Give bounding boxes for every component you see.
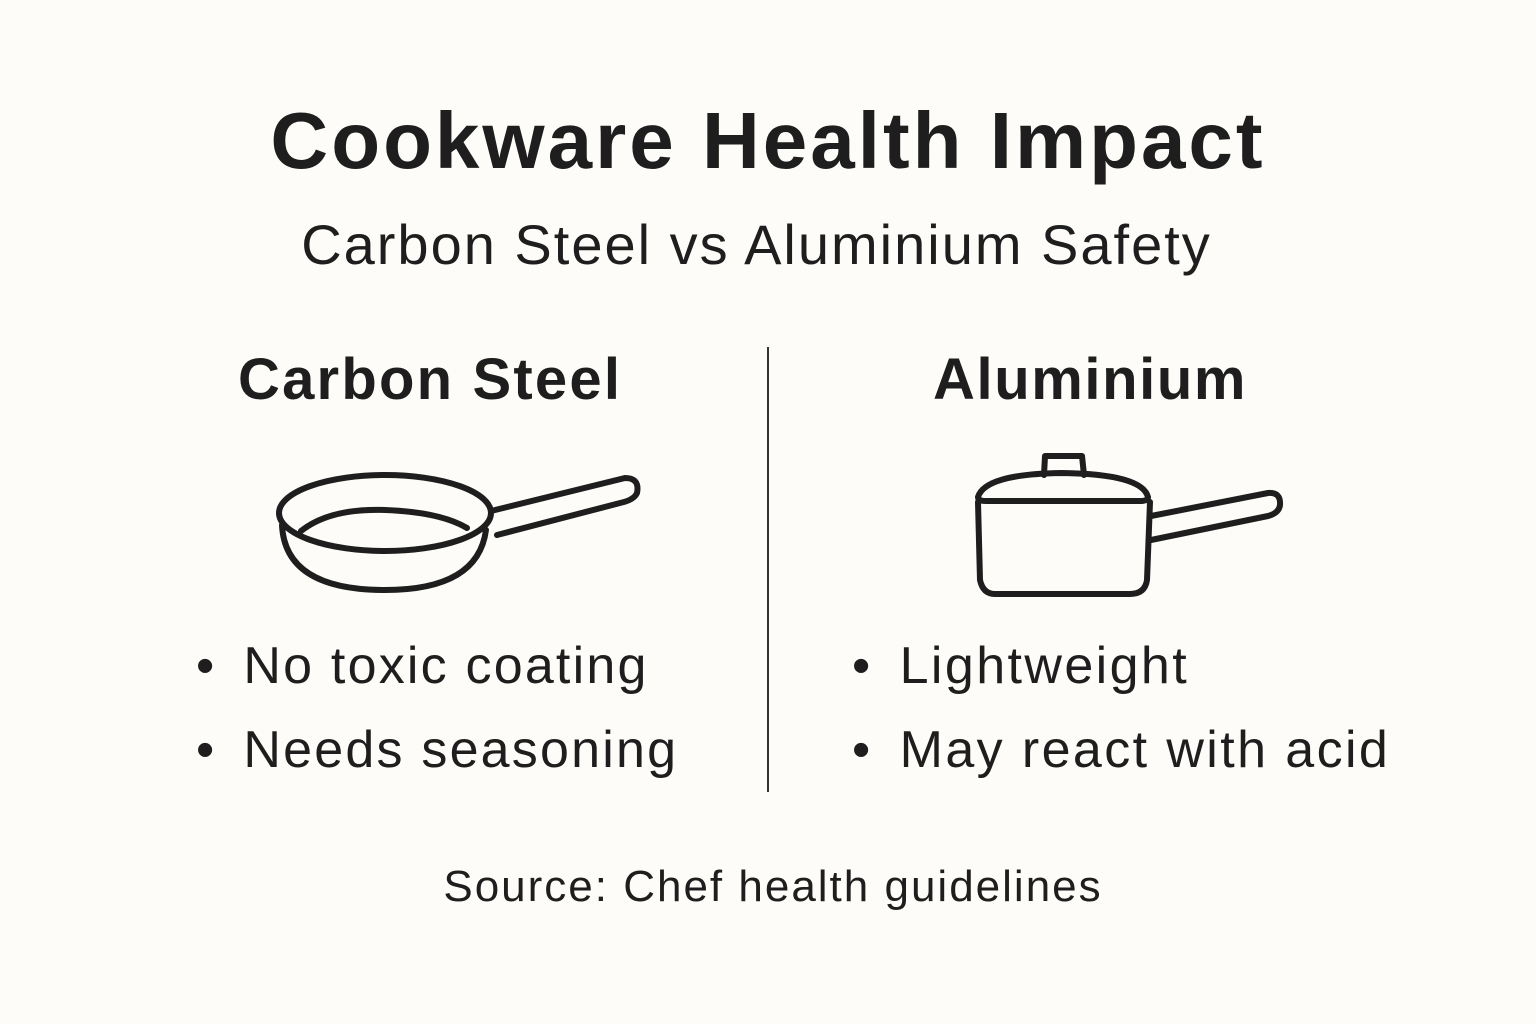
bullets: aluminium (852, 637, 1390, 779)
bullets: carbon steel (196, 637, 678, 779)
subtitle: Carbon Steel vs Aluminium Safety (301, 213, 1212, 276)
heading: aluminium: Aluminium (933, 347, 1247, 412)
bullets: aluminium: • May react with acid (852, 721, 1390, 779)
bullets: carbon steel: • No toxic coating (196, 637, 649, 695)
divider (767, 347, 769, 792)
bullets: carbon steel: • Needs seasoning (196, 721, 678, 779)
source: Source: Chef health guidelines (443, 862, 1103, 911)
heading: carbon steel: Carbon Steel (238, 347, 622, 412)
icon: saucepan (975, 453, 1284, 597)
title: Cookware Health Impact (270, 96, 1266, 185)
icon: frying pan (276, 472, 640, 593)
bullets: aluminium: • Lightweight (852, 637, 1189, 695)
